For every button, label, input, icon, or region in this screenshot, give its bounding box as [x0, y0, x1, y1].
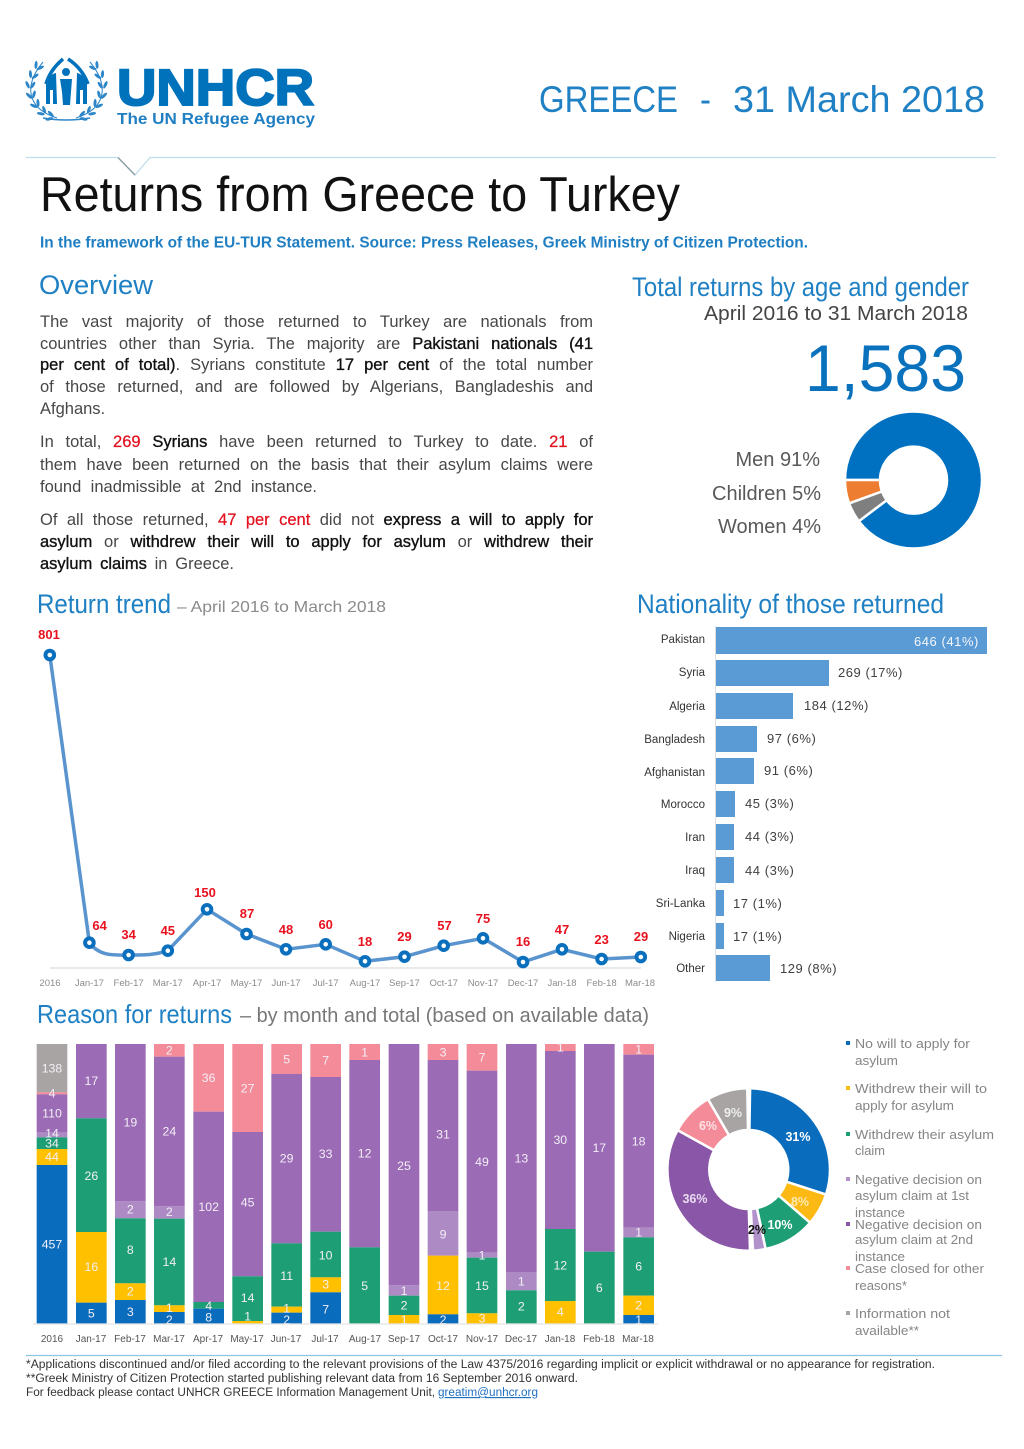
heading: return trend — [37, 589, 386, 619]
footnotes — [26, 1359, 935, 1399]
bar: Dec-17: 13 — [514, 1152, 528, 1166]
value labels: 44 (3%) — [745, 863, 794, 878]
tagline: The UN Refugee Agency — [117, 111, 315, 128]
bar: Jan-17: 17 — [84, 1074, 98, 1088]
legend item: negative 2nd — [846, 1217, 982, 1264]
legend item: not available: Information not — [855, 1306, 950, 1321]
bar: Jun-17: 29 — [280, 1152, 294, 1166]
wordmark: UNHCR — [117, 59, 314, 116]
bar: Oct-17: 31 — [436, 1128, 450, 1142]
bar: Jul-17: 10 — [319, 1248, 333, 1262]
axis labels: Jan-18 — [545, 1334, 576, 1345]
legend item: negative 2nd: instance — [855, 1249, 905, 1264]
value labels: 646 (41%) — [914, 634, 979, 649]
legend item: withdrew claim — [846, 1127, 994, 1158]
axis labels: Oct-17 — [429, 978, 458, 989]
bar: May-17: 45 — [241, 1196, 255, 1210]
value labels: 269 (17%) — [838, 665, 903, 680]
title: Returns from Greece to Turkey — [40, 168, 680, 222]
bar: Feb-18: 6 — [596, 1281, 603, 1295]
bar: Jan-17 — [76, 1044, 107, 1323]
bar: Mar-17: 24 — [162, 1124, 176, 1138]
footnotes: greatim@unhcr.org — [438, 1387, 538, 1399]
country labels: Afghanistan — [644, 767, 705, 779]
legend item: not available: available** — [855, 1323, 919, 1338]
text block: overview: them have been returned on the basis that their asylum claims were — [40, 456, 593, 474]
value labels: 91 (6%) — [764, 763, 813, 778]
heading: overview: Overview — [39, 270, 153, 300]
axis labels: Jul-17 — [313, 978, 339, 989]
bar: Mar-18: 1 — [635, 1226, 642, 1240]
heading: total returns: Total returns by age and gender — [632, 272, 969, 302]
bar: Feb-17 — [115, 1044, 146, 1323]
legend item: withdrew will — [846, 1081, 987, 1113]
axis labels — [39, 978, 655, 989]
bar: Mar-17 — [154, 1044, 185, 1327]
axis labels: Apr-17 — [193, 978, 221, 989]
bar: Mar-17: 2 — [166, 1044, 173, 1058]
axis labels: Mar-18 — [625, 978, 655, 989]
stacked bar chart: reasons by month — [33, 1040, 658, 1345]
value labels: 129 (8%) — [780, 961, 837, 976]
value labels — [733, 634, 979, 976]
bar: Oct-17: 3 — [440, 1045, 447, 1059]
legend item: not available — [846, 1306, 950, 1338]
logo: UNHCR — [24, 59, 315, 128]
footnotes: **Greek Ministry of Citizen Protection started publishing relevant data from 16 September 2016 onward. — [26, 1373, 578, 1385]
axis labels: Jan-17 — [75, 978, 104, 989]
axis labels: May-17 — [231, 978, 262, 989]
bar: Mar-18: 2 — [635, 1298, 642, 1312]
data labels: 16 — [516, 934, 530, 949]
bar: Mar-18: 18 — [632, 1134, 646, 1148]
bar: Mar-18 — [623, 1042, 654, 1327]
country labels: Nigeria — [669, 931, 706, 943]
axis labels: Mar-17 — [153, 1334, 185, 1345]
bar: Apr-17: 36 — [202, 1071, 216, 1085]
bar: Mar-18: 6 — [635, 1260, 642, 1274]
bar: Feb-17: 2 — [127, 1202, 134, 1216]
legend: reasons — [846, 1036, 994, 1338]
legend item: withdrew will: Withdrew their will to — [855, 1081, 987, 1096]
bar: 2016: 44 — [45, 1150, 59, 1164]
bar: 2016: 14 — [45, 1126, 59, 1140]
country labels — [644, 634, 706, 975]
legend item: case closed: reasons* — [855, 1278, 907, 1293]
text block: overview: Afghans. — [40, 400, 105, 418]
bar: Apr-17 — [193, 1044, 224, 1324]
bar: Sep-17: 1 — [401, 1284, 408, 1298]
bar: Mar-18: 1 — [635, 1042, 642, 1056]
bar: Dec-17 — [506, 1044, 537, 1323]
bar: Jun-17: 11 — [280, 1269, 293, 1283]
bar: Oct-17 — [428, 1044, 458, 1327]
data labels: 47 — [555, 922, 569, 937]
donut legend: Children 5% — [712, 483, 821, 505]
data labels: 45 — [161, 923, 175, 938]
bar: Jul-17: 7 — [322, 1054, 329, 1068]
axis labels: 2016 — [39, 978, 61, 989]
country labels: Other — [676, 963, 705, 975]
country labels: Iraq — [685, 865, 705, 877]
percentage labels: 9% — [724, 1106, 742, 1120]
period label: April 2016 to 31 March 2018 — [704, 303, 968, 325]
data labels: 23 — [594, 932, 609, 947]
value labels: 97 (6%) — [767, 731, 816, 746]
bar: Dec-17: 2 — [518, 1300, 525, 1314]
legend item: negative 1st: Negative decision on — [855, 1172, 982, 1187]
legend item: negative 2nd: asylum claim at 2nd — [855, 1232, 973, 1247]
axis labels: Oct-17 — [428, 1334, 458, 1345]
bar: Jun-17: 2 — [283, 1313, 290, 1327]
header: country and date — [539, 79, 985, 120]
data labels: 29 — [634, 929, 648, 944]
bar: Jan-17: 26 — [84, 1169, 98, 1183]
donut legend — [712, 449, 821, 538]
percentage labels: 31% — [785, 1130, 811, 1144]
bar: Feb-17: 19 — [123, 1116, 137, 1130]
bar: Feb-17: 3 — [127, 1305, 134, 1319]
text block: overview: found inadmissible at 2nd instance. — [40, 478, 317, 496]
bar: 2016: 457 — [42, 1238, 62, 1252]
donut legend: Women 4% — [718, 516, 821, 538]
data labels: 29 — [397, 929, 412, 944]
bar: Feb-17: 8 — [127, 1243, 134, 1257]
text block: overview: In total, 269 Syrians have been returned to Turkey to date. 21 of — [40, 433, 593, 451]
bar: Sep-17: 1 — [401, 1313, 408, 1327]
bar: 2016 — [37, 1044, 67, 1323]
bar: May-17: 27 — [241, 1081, 255, 1095]
axis labels: Nov-17 — [468, 978, 498, 989]
legend item: no will: asylum — [855, 1053, 898, 1068]
legend item: negative 1st: instance — [855, 1205, 905, 1220]
axis labels: Feb-18 — [587, 978, 617, 989]
value labels: 44 (3%) — [745, 829, 794, 844]
donut legend: Men 91% — [736, 449, 820, 471]
bar: Nov-17: 1 — [479, 1248, 486, 1262]
bar: Dec-17: 1 — [518, 1274, 525, 1288]
bar: Feb-17: 2 — [127, 1284, 134, 1298]
bar: Oct-17: 9 — [440, 1228, 447, 1242]
text block: overview: Of all those returned, 47 per cent did not express a will to apply for — [40, 511, 593, 529]
data labels: 64 — [92, 918, 108, 933]
axis labels: Mar-17 — [153, 978, 183, 989]
text block: overview: of those returned, and are followed by Algerians, Bangladeshis and — [40, 378, 593, 396]
footnotes: For feedback please contact UNHCR GREECE Information Management Unit, — [26, 1387, 435, 1399]
heading: return trend: – April 2016 to March 2018 — [177, 599, 386, 616]
value labels: 17 (1%) — [733, 896, 782, 911]
axis labels: Jul-17 — [311, 1334, 339, 1345]
percentage labels — [682, 1106, 811, 1237]
axis labels: Sep-17 — [389, 978, 420, 989]
value labels: 45 (3%) — [745, 796, 794, 811]
bar: Nov-17 — [467, 1044, 497, 1326]
data labels — [38, 627, 648, 949]
bar: Jan-18: 12 — [553, 1258, 567, 1272]
bar: Oct-17: 2 — [440, 1313, 447, 1327]
legend item: negative 1st — [846, 1172, 982, 1220]
axis labels: Jan-18 — [547, 978, 577, 989]
axis labels: 2016 — [41, 1334, 64, 1345]
axis labels: Feb-17 — [114, 978, 144, 989]
bar chart: nationality — [644, 626, 987, 982]
axis labels: Feb-18 — [583, 1334, 615, 1345]
legend item: case closed: Case closed for other — [855, 1261, 985, 1276]
value labels: 184 (12%) — [804, 698, 869, 713]
header: country and date: GREECE — [539, 79, 678, 120]
country labels: Bangladesh — [644, 734, 705, 746]
bar: May-17: 14 — [241, 1291, 255, 1305]
text block: overview: per cent of total). Syrians constitute 17 per cent of the total number — [40, 356, 593, 374]
percentage labels: 8% — [791, 1195, 809, 1209]
heading: reason for returns — [37, 999, 649, 1029]
data labels: 60 — [318, 917, 333, 932]
axis labels: Aug-17 — [349, 1334, 382, 1345]
bar: Jun-17: 1 — [283, 1302, 290, 1316]
header rule with chevron — [26, 158, 996, 175]
donut chart: age and gender — [845, 411, 982, 548]
bar: Nov-17: 15 — [475, 1279, 489, 1293]
bar: Aug-17: 5 — [361, 1279, 368, 1293]
axis labels: Jan-17 — [76, 1334, 107, 1345]
footnotes: *Applications discontinued and/or filed according to the relevant provisions of the Law 4375/2016 regarding implicit or explicit withdrawal or no appearance for registration. — [26, 1359, 935, 1371]
bar: Feb-18: 17 — [592, 1141, 606, 1155]
legend item: withdrew claim: claim — [855, 1143, 885, 1158]
data labels: 34 — [121, 927, 137, 942]
line chart: monthly returns — [38, 627, 655, 989]
text block: overview: asylum or withdrew their will to apply for asylum or withdrew their — [40, 533, 593, 551]
axis labels: Mar-18 — [622, 1334, 654, 1345]
header: country and date: - — [700, 79, 711, 120]
country labels: Syria — [679, 667, 706, 679]
big number: total returns: 1,583 — [805, 331, 966, 405]
data labels: 87 — [240, 906, 254, 921]
bar: Aug-17: 1 — [361, 1045, 368, 1059]
text block: overview: The vast majority of those returned to Turkey are nationals from — [40, 313, 593, 331]
country labels: Iran — [685, 832, 705, 844]
percentage labels: 36% — [682, 1192, 708, 1206]
bar: Mar-17: 2 — [166, 1205, 173, 1219]
heading: nationality: Nationality of those returned — [637, 589, 944, 619]
data labels: 18 — [358, 934, 372, 949]
bar: Nov-17: 3 — [479, 1312, 486, 1326]
legend item: negative 1st: asylum claim at 1st — [855, 1188, 969, 1203]
bar: Apr-17: 4 — [205, 1299, 212, 1313]
subtitle: In the framework of the EU-TUR Statement. Source: Press Releases, Greek Ministry of Citizen Protection. — [40, 234, 808, 252]
data labels: 801 — [38, 627, 60, 642]
percentage labels: 10% — [767, 1218, 793, 1232]
bar: Jan-18 — [545, 1040, 576, 1323]
legend item: negative 2nd: Negative decision on — [855, 1217, 982, 1232]
header: country and date: 31 March 2018 — [733, 79, 985, 120]
bar: Feb-18 — [584, 1044, 615, 1323]
axis labels: Aug-17 — [350, 978, 380, 989]
icon: laurel wreath with sheltering hands — [24, 59, 109, 123]
country labels: Sri-Lanka — [656, 898, 706, 910]
legend item: withdrew will: apply for asylum — [855, 1098, 954, 1113]
data labels: 57 — [437, 918, 452, 933]
heading: return trend: Return trend — [37, 589, 171, 619]
bar: May-17: 1 — [244, 1310, 251, 1324]
legend item: case closed — [846, 1261, 985, 1293]
bar: Jan-18: 30 — [553, 1133, 567, 1147]
bar: Jan-18: 4 — [557, 1305, 564, 1319]
bar: Aug-17: 12 — [358, 1147, 372, 1161]
data labels: 48 — [279, 922, 293, 937]
country labels: Algeria — [669, 701, 706, 713]
bar: Jan-17: 16 — [84, 1260, 98, 1274]
country labels: Pakistan — [661, 634, 705, 646]
bar: Mar-17: 2 — [166, 1313, 173, 1327]
bar: Jan-17: 5 — [88, 1306, 95, 1320]
bar: Mar-17: 1 — [166, 1301, 173, 1315]
bar: 2016: 138 — [42, 1062, 62, 1076]
bar: Jul-17 — [310, 1044, 341, 1323]
bar: Aug-17 — [349, 1044, 380, 1323]
data labels: 75 — [476, 911, 490, 926]
percentage labels: 6% — [699, 1119, 717, 1133]
donut chart: reasons total — [667, 1088, 830, 1251]
country labels: Morocco — [661, 799, 705, 811]
bar: 2016: 110 — [42, 1107, 62, 1121]
bar: Jun-17 — [271, 1044, 302, 1327]
value labels: 17 (1%) — [733, 929, 782, 944]
bar: Nov-17: 7 — [479, 1051, 486, 1065]
text block: overview: asylum claims in Greece. — [40, 555, 234, 573]
bar: 2016: 34 — [45, 1137, 59, 1151]
bar: Apr-17: 102 — [198, 1200, 219, 1214]
bar: Sep-17: 25 — [397, 1159, 411, 1173]
axis labels: Nov-17 — [466, 1334, 499, 1345]
axis labels — [41, 1334, 654, 1345]
axis labels: Dec-17 — [508, 978, 538, 989]
axis labels: Dec-17 — [505, 1334, 538, 1345]
bar: May-17 — [232, 1044, 263, 1324]
heading: reason for returns: Reason for returns — [37, 999, 232, 1029]
axis labels: Jun-17 — [271, 1334, 302, 1345]
legend item: no will: No will to apply for — [855, 1036, 971, 1051]
axis labels: Jun-17 — [271, 978, 301, 989]
bar: Mar-18: 1 — [635, 1313, 642, 1327]
bar: Nov-17: 49 — [475, 1155, 489, 1169]
text block: overview: countries other than Syria. The majority are Pakistani nationals (41 — [40, 335, 593, 353]
bar: Jan-18: 1 — [557, 1040, 564, 1054]
bar: Sep-17 — [389, 1044, 419, 1327]
bar: 2016: 4 — [49, 1087, 56, 1101]
bar: Oct-17: 12 — [436, 1279, 450, 1293]
legend item: no will — [846, 1036, 971, 1068]
text block: overview — [40, 313, 593, 573]
heading: reason for returns: – by month and total (based on available data) — [240, 1005, 649, 1027]
bar: Jul-17: 33 — [319, 1147, 333, 1161]
bar: Jul-17: 7 — [322, 1302, 329, 1316]
percentage labels: 2% — [748, 1223, 766, 1237]
axis labels: May-17 — [230, 1334, 264, 1345]
data labels: 150 — [194, 885, 216, 900]
bar: Mar-17: 14 — [162, 1255, 176, 1269]
legend item: withdrew claim: Withdrew their asylum — [855, 1127, 994, 1142]
bar: Jul-17: 3 — [322, 1278, 329, 1292]
bar: Sep-17: 2 — [401, 1298, 408, 1312]
axis labels: Sep-17 — [388, 1334, 421, 1345]
axis labels: Feb-17 — [114, 1334, 146, 1345]
bar: Apr-17: 8 — [205, 1310, 212, 1324]
axis labels: Apr-17 — [193, 1334, 223, 1345]
bar: Jun-17: 5 — [283, 1052, 290, 1066]
